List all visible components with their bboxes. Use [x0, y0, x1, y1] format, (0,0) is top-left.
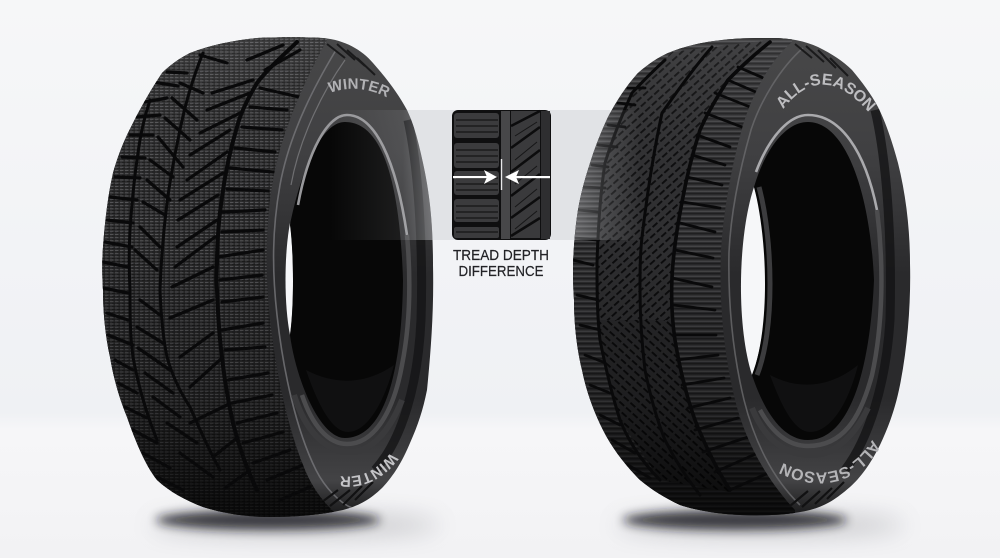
label: all-season bottom: ALL-SEASON [779, 440, 879, 484]
caption: tread depth difference [453, 248, 549, 280]
caption: tread depth difference: DIFFERENCE [458, 264, 544, 280]
arrow: left pointing right [453, 170, 497, 184]
shadow: left tire [150, 510, 440, 536]
marker: center line [501, 159, 502, 190]
inset all-season diagonal grooves [511, 111, 540, 236]
winter tread grooves [103, 42, 310, 500]
all-season bead rim ring [752, 115, 881, 455]
winter bead rim ring [294, 115, 409, 452]
arrow: right pointing left [505, 170, 550, 184]
label: all-season top: ALL-SEASON [778, 74, 876, 112]
label: winter top: WINTER [327, 78, 390, 98]
inset all-season fine sipes [515, 122, 537, 229]
winter far-side opening [286, 223, 293, 335]
caption: tread depth difference: TREAD DEPTH [453, 248, 549, 264]
shadow: right tire [615, 510, 905, 536]
all-season sidewall ridges [729, 44, 890, 507]
winter inner wall tread shading [306, 365, 394, 432]
all-season far-side opening [741, 187, 766, 375]
inset outer rib [541, 111, 550, 239]
band overlay on left tire [356, 110, 432, 240]
all-season herringbone ribs [597, 40, 770, 320]
inset center groove [501, 111, 510, 239]
inset all-season blocks [511, 111, 540, 238]
comparison band behind inset [400, 110, 610, 240]
all-season inner wall tread shading [770, 365, 858, 432]
tire: winter [102, 37, 434, 517]
inset: tread close-up [452, 110, 551, 240]
all-season inner rim edge [757, 187, 770, 375]
band overlay on right tire [574, 110, 632, 240]
tire: all-season [573, 38, 910, 516]
winter sidewall ridges [274, 44, 422, 508]
inset winter tread blocks [454, 113, 499, 238]
infographic: winter vs all-season tire comparison [102, 37, 910, 548]
label: winter bottom: WINTER [340, 454, 399, 487]
winter tire opening [290, 122, 403, 438]
inset winter sipes [456, 120, 498, 232]
all-season tire opening [752, 122, 874, 440]
all-season tread grooves [573, 42, 775, 495]
